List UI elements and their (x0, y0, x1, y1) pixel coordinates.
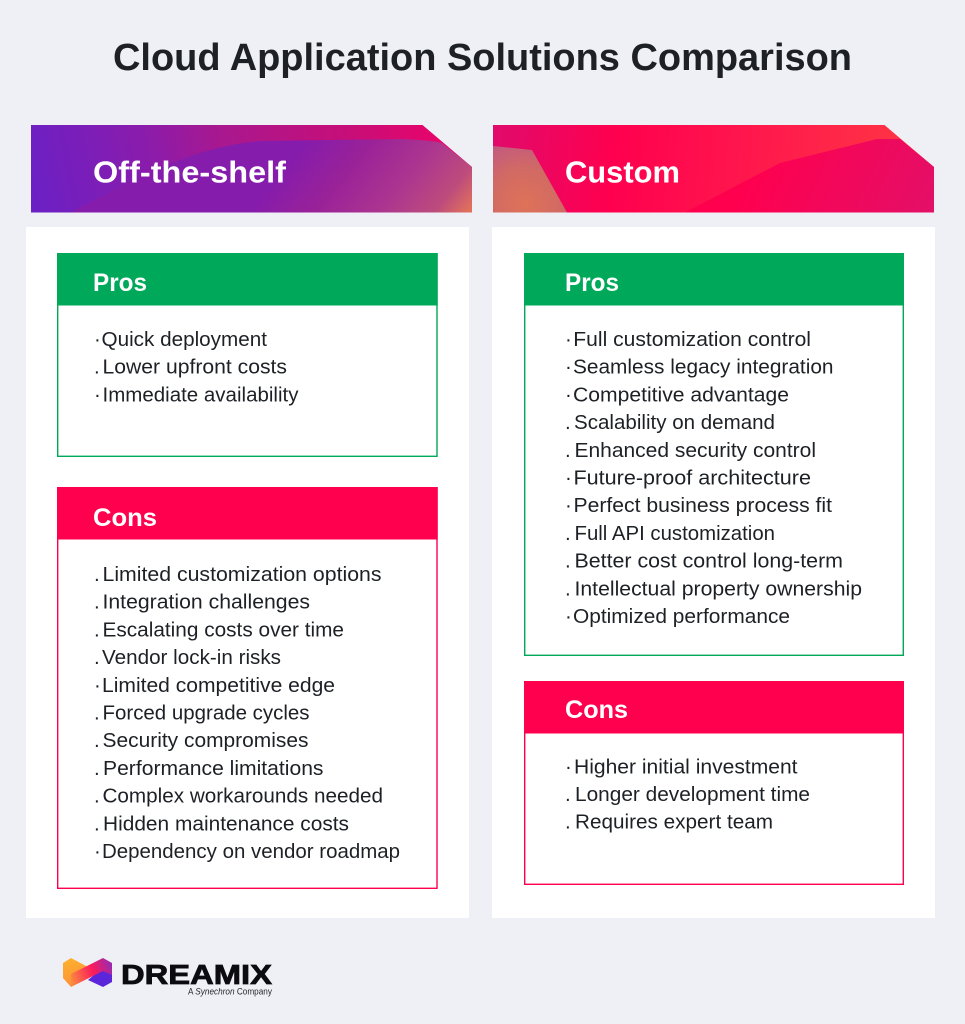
list: off-the-shelf cons: Vendor lock-in risks (102, 646, 281, 669)
list: off-the-shelf cons: . (94, 646, 100, 669)
list: custom pros: · (565, 605, 572, 628)
list: custom pros: Scalability on demand (574, 411, 775, 434)
heading: pros: Pros (93, 269, 147, 297)
list: off-the-shelf cons: . (94, 563, 100, 586)
panel: off-the-shelf body (26, 227, 469, 918)
list: custom pros: · (565, 494, 572, 517)
list: custom cons: . (565, 811, 571, 834)
list: off-the-shelf cons: . (94, 591, 100, 614)
list: off-the-shelf cons: . (94, 785, 100, 808)
list: custom cons: · (565, 755, 572, 778)
list: custom pros: · (565, 383, 572, 406)
list: custom pros: . (565, 577, 571, 600)
list: off-the-shelf pros: · (94, 383, 101, 406)
list: off-the-shelf cons: Complex workarounds needed (102, 785, 383, 808)
list: off-the-shelf cons: Escalating costs over time (102, 618, 344, 641)
list: off-the-shelf pros: Quick deployment (102, 328, 267, 351)
list: custom pros: Full API customization (574, 522, 775, 545)
list: custom cons: Longer development time (575, 783, 810, 806)
list: custom cons: Requires expert team (575, 811, 773, 834)
list: off-the-shelf pros: . (94, 356, 100, 379)
wordmark: DREAMIX (121, 959, 272, 990)
list: off-the-shelf cons: Dependency on vendor roadmap (102, 840, 400, 863)
list: custom pros: · (565, 466, 572, 490)
title: Cloud Application Solutions Comparison (113, 37, 852, 79)
list: off-the-shelf cons (94, 563, 400, 863)
list: custom pros: Intellectual property ownership (574, 577, 862, 600)
list: off-the-shelf cons: . (94, 757, 100, 780)
list: off-the-shelf cons: Limited competitive edge (102, 674, 335, 697)
list: custom cons (565, 755, 810, 834)
panel: off-the-shelf pros (57, 253, 438, 456)
list: custom pros: . (565, 522, 571, 545)
panel: custom body (492, 227, 935, 918)
list: off-the-shelf cons: Hidden maintenance costs (103, 812, 349, 835)
list: custom pros: Optimized performance (573, 605, 790, 628)
list: off-the-shelf cons: . (94, 702, 100, 724)
list: custom pros: Full customization control (573, 328, 811, 351)
panel: custom cons (524, 681, 904, 884)
list: off-the-shelf pros: Lower upfront costs (102, 356, 287, 379)
list: custom pros: Future-proof architecture (574, 466, 811, 490)
list: off-the-shelf cons: · (94, 674, 101, 697)
list: custom pros (565, 328, 862, 628)
logo: dreamix (63, 958, 272, 996)
heading: custom: Custom (565, 154, 680, 190)
list: off-the-shelf cons: Limited customization options (102, 563, 382, 586)
list: custom cons: Higher initial investment (574, 755, 798, 778)
list: custom pros: Better cost control long-term (574, 550, 843, 573)
icon: dreamix ribbon mark (63, 958, 112, 987)
list: off-the-shelf cons: · (94, 840, 101, 863)
heading: cons: Cons (93, 504, 157, 532)
panel: custom banner (493, 125, 934, 212)
heading: off-the-shelf: Off-the-shelf (93, 154, 287, 190)
list: off-the-shelf pros (94, 328, 299, 406)
list: custom pros: . (565, 439, 571, 462)
list: off-the-shelf cons: . (94, 618, 100, 641)
heading: cons: Cons (565, 696, 628, 724)
list: off-the-shelf cons: Performance limitations (103, 757, 324, 780)
panel: custom pros (524, 253, 904, 655)
heading: pros: Pros (565, 269, 619, 297)
list: custom pros: Perfect business process fit (574, 494, 832, 517)
list: custom pros: . (565, 550, 571, 573)
list: custom pros: Competitive advantage (573, 383, 789, 406)
tagline: A Synechron Company (188, 986, 272, 996)
list: off-the-shelf pros: Immediate availability (102, 383, 299, 406)
list: off-the-shelf cons: Forced upgrade cycles (102, 702, 310, 724)
panel: off-the-shelf banner (31, 125, 472, 212)
list: off-the-shelf pros: · (94, 328, 101, 351)
list: custom cons: . (565, 783, 571, 806)
panel: off-the-shelf cons (57, 487, 438, 888)
list: off-the-shelf cons: Integration challenges (102, 591, 310, 614)
list: custom pros: . (565, 411, 571, 434)
list: custom pros: Enhanced security control (574, 439, 816, 462)
list: custom pros: · (565, 328, 572, 351)
list: off-the-shelf cons: . (94, 729, 100, 752)
list: custom pros: Seamless legacy integration (573, 356, 834, 379)
list: off-the-shelf cons: . (94, 812, 100, 835)
list: off-the-shelf cons: Security compromises (102, 729, 308, 752)
list: custom pros: · (565, 356, 572, 379)
